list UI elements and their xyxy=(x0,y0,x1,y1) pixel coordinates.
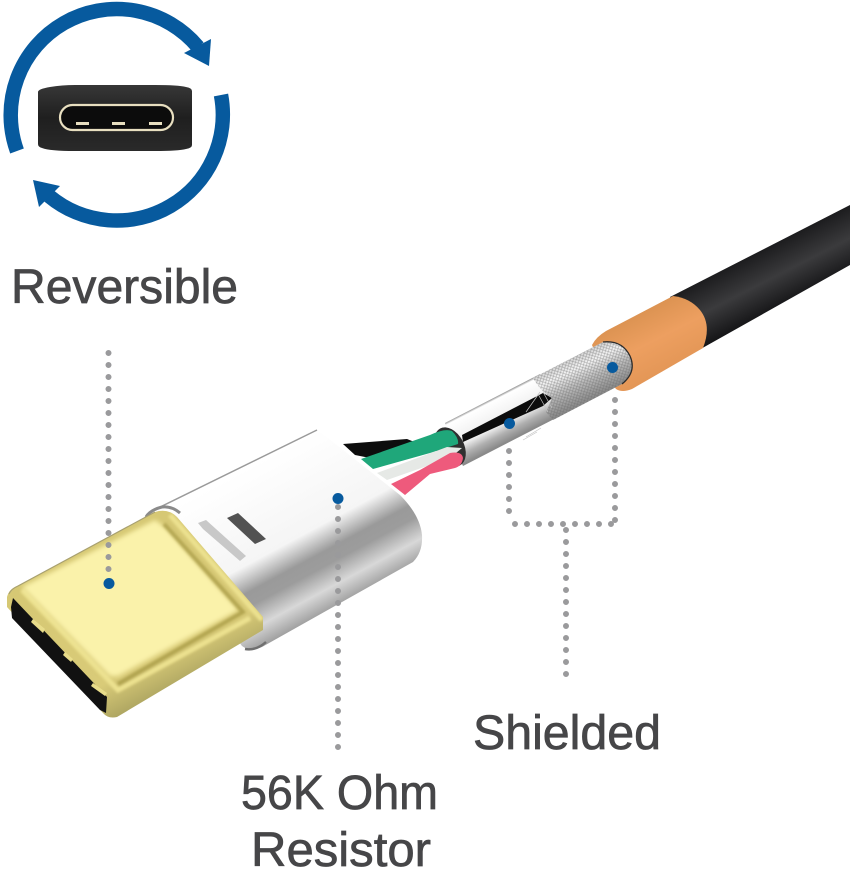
icon: reversible connector xyxy=(11,9,223,221)
black wire xyxy=(343,439,440,460)
black inner stripe xyxy=(462,393,552,442)
leader line: reversible xyxy=(106,353,112,570)
marker: plug xyxy=(104,578,114,589)
icon: top rotation arrow xyxy=(11,9,211,151)
marker: braid xyxy=(607,362,618,373)
orange inner sleeve xyxy=(592,296,707,391)
green wire xyxy=(361,430,458,469)
frayed braid strands xyxy=(523,392,552,440)
leader line: shielded label xyxy=(563,530,569,676)
pink wire xyxy=(391,453,463,495)
yellow contact face xyxy=(22,520,238,676)
marker: foil xyxy=(504,418,515,429)
leader line: braided shield xyxy=(612,400,618,521)
label: 56K Ohm Resistor xyxy=(241,767,438,869)
cable illustration xyxy=(7,205,850,718)
inner wire opening xyxy=(428,422,472,472)
outer bevel highlight xyxy=(22,515,262,690)
leader line: resistor xyxy=(335,507,341,752)
port opening xyxy=(11,598,107,713)
marker: resistor xyxy=(332,493,344,504)
label: 56K Ohm Resistor: 56K Ohm xyxy=(241,767,438,820)
label: Shielded: Shielded xyxy=(473,707,661,760)
braided shield xyxy=(533,342,632,420)
black cable jacket xyxy=(670,205,850,355)
leader line: shield bracket xyxy=(515,521,615,527)
light slot xyxy=(198,520,246,561)
heading: Reversible: Reversible xyxy=(11,261,238,314)
foil layer xyxy=(445,374,560,466)
icon: bottom rotation arrow xyxy=(33,95,223,221)
white wire xyxy=(377,447,462,480)
dark slit xyxy=(227,513,266,544)
leader line: foil shield xyxy=(506,451,512,512)
USB-C metal housing xyxy=(146,430,422,649)
icon: USB-C port xyxy=(38,85,192,151)
bevel shadow xyxy=(118,524,243,684)
gold plug xyxy=(7,511,263,718)
